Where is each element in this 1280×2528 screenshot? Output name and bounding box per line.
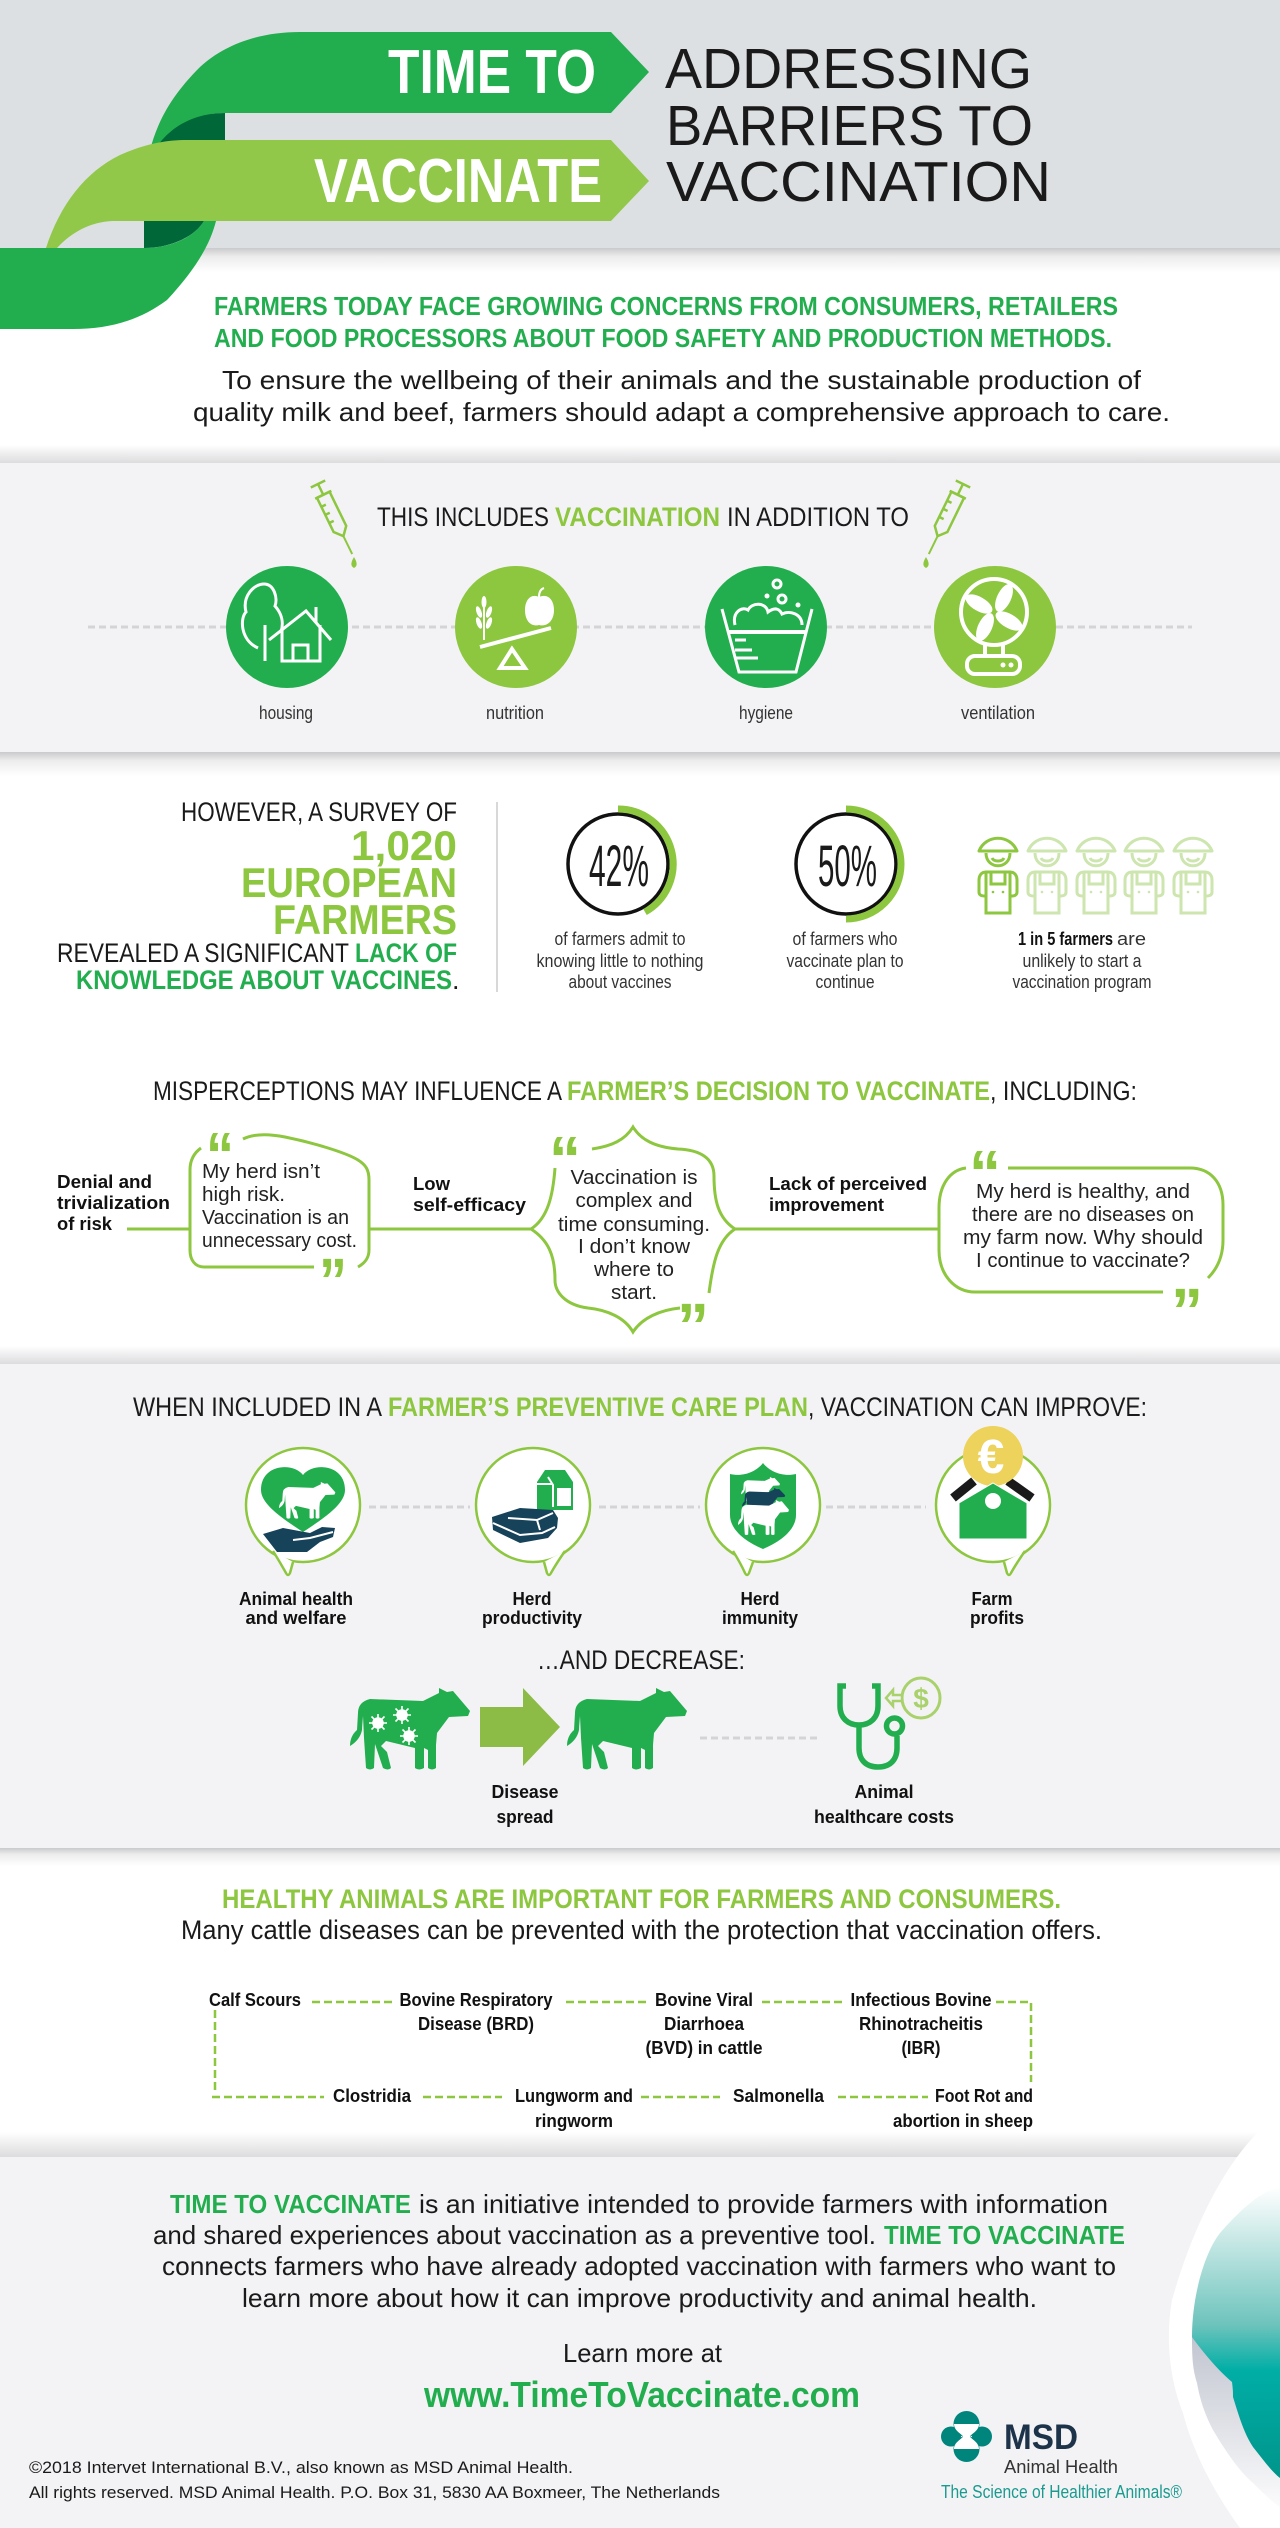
disease: salmonella: Salmonella bbox=[733, 2086, 825, 2106]
initiative text bbox=[153, 2189, 1125, 2313]
heading: includes vaccination: VACCINATION bbox=[555, 502, 720, 532]
copyright: All rights reserved. MSD Animal Health. P.O. Box 31, 5830 AA Boxmeer, The Netherlands bbox=[29, 2483, 720, 2502]
title bbox=[665, 37, 1051, 214]
ribbon label: TIME TO: TIME TO bbox=[388, 38, 596, 107]
disease: lungworm: ringworm bbox=[535, 2111, 613, 2131]
heading: includes vaccination: IN ADDITION TO bbox=[727, 502, 909, 532]
ribbon label: VACCINATE: VACCINATE bbox=[314, 147, 602, 216]
ribbon: dark green TIME TO bbox=[0, 32, 649, 329]
quote bubble: healthy herd: “ bbox=[969, 1137, 1001, 1209]
heading: and decrease: …AND DECREASE: bbox=[537, 1645, 745, 1675]
title: VACCINATION bbox=[666, 150, 1051, 214]
stat: 50 percent: 50% bbox=[818, 834, 877, 899]
icon: farm profits: € bbox=[978, 1431, 1004, 1484]
label: herd productivity bbox=[482, 1589, 582, 1628]
care labels bbox=[259, 703, 1035, 723]
misperception: lack of improvement: improvement bbox=[769, 1195, 884, 1215]
decorative swoosh bbox=[1169, 2130, 1280, 2528]
disease: IBR: Infectious Bovine bbox=[850, 1990, 992, 2010]
survey statement: HOWEVER, A SURVEY OF bbox=[181, 797, 457, 827]
disease loop bbox=[209, 1990, 1033, 2131]
initiative text: and shared experiences about vaccination as a preventive tool. bbox=[153, 2220, 876, 2250]
stat: 50 percent: continue bbox=[816, 972, 874, 992]
learn more: Learn more at bbox=[563, 2338, 723, 2368]
disease: IBR bbox=[850, 1990, 992, 2058]
heading: healthy animals: HEALTHY ANIMALS ARE IMPORTANT FOR FARMERS AND CONSUMERS. bbox=[222, 1884, 1061, 1914]
survey statement: KNOWLEDGE ABOUT VACCINES bbox=[76, 965, 452, 995]
ribbon: light green VACCINATE bbox=[46, 140, 649, 248]
label: healthcare costs: Animal bbox=[854, 1782, 914, 1802]
heading: improve bbox=[133, 1392, 1147, 1422]
disease: calf scours: Calf Scours bbox=[209, 1990, 301, 2010]
quote bubble: high risk bbox=[190, 1119, 369, 1317]
icon: housing bbox=[226, 566, 348, 688]
website: www.TimeToVaccinate.com bbox=[423, 2374, 860, 2415]
disease: BVD: (BVD) in cattle bbox=[646, 2038, 762, 2058]
misperception: low self-efficacy bbox=[413, 1174, 526, 1215]
disease: BVD: Bovine Viral bbox=[655, 1990, 753, 2010]
disease: foot rot bbox=[893, 2086, 1033, 2131]
stat: 1 in 5 farmers: vaccination program bbox=[1012, 972, 1152, 992]
label: herd immunity: immunity bbox=[722, 1608, 798, 1628]
survey statement: . bbox=[452, 965, 460, 995]
quote bubble: complex bbox=[531, 1123, 735, 1362]
quote bubble: healthy herd: I continue to vaccinate? bbox=[976, 1250, 1190, 1272]
quote bubble: healthy herd: My herd is healthy, and bbox=[976, 1181, 1190, 1203]
misperception: lack of improvement bbox=[769, 1174, 927, 1215]
label: herd productivity: Herd bbox=[512, 1589, 552, 1609]
care labels: ventilation bbox=[961, 703, 1035, 723]
initiative text: TIME TO VACCINATE bbox=[884, 2220, 1125, 2250]
disease: BRD bbox=[400, 1990, 552, 2034]
icon: nutrition bbox=[455, 566, 577, 688]
heading: misperceptions bbox=[153, 1076, 1137, 1106]
quote bubble: complex: Vaccination is bbox=[570, 1167, 698, 1189]
label: animal health: Animal health bbox=[239, 1589, 353, 1609]
stat: 42 percent: 42% bbox=[589, 834, 649, 899]
quote bubble: complex: ” bbox=[677, 1290, 709, 1362]
disease: BVD bbox=[646, 1990, 762, 2058]
label: animal health: and welfare bbox=[246, 1608, 346, 1628]
quote bubble: complex: start. bbox=[611, 1282, 657, 1304]
care labels: nutrition bbox=[486, 703, 544, 723]
initiative text: learn more about how it can improve productivity and animal health. bbox=[242, 2283, 1037, 2313]
icon: MSD hourglass bbox=[941, 2411, 992, 2462]
panel: benefits bbox=[0, 1346, 1280, 1866]
icon: stethoscope bbox=[840, 1678, 940, 1767]
logo: MSD Animal Health: The Science of Healthier Animals® bbox=[941, 2482, 1182, 2502]
icon: hygiene bbox=[705, 566, 827, 688]
icon: infected cow bbox=[350, 1688, 470, 1770]
quote bubble: healthy herd: there are no diseases on bbox=[972, 1204, 1194, 1226]
survey statement: EUROPEAN bbox=[241, 859, 457, 906]
panel: comprehensive care bbox=[0, 445, 1280, 776]
intro text: quality milk and beef, farmers should adapt a comprehensive approach to care. bbox=[193, 397, 1170, 427]
disease: BRD: Bovine Respiratory bbox=[400, 1990, 552, 2010]
label: farm profits: profits bbox=[970, 1608, 1024, 1628]
copyright bbox=[29, 2458, 720, 2502]
icon: syringe left bbox=[310, 480, 360, 568]
copyright: ©2018 Intervet International B.V., also known as MSD Animal Health. bbox=[29, 2458, 573, 2477]
icon: syringe right bbox=[921, 480, 971, 568]
stat: 42 percent: knowing little to nothing bbox=[536, 951, 704, 971]
quote bubble: complex: “ bbox=[549, 1123, 581, 1195]
label: herd immunity bbox=[722, 1589, 798, 1628]
icon: herd immunity bbox=[706, 1448, 820, 1575]
icon: ventilation bbox=[934, 566, 1056, 688]
intro text: To ensure the wellbeing of their animals and the sustainable production of bbox=[222, 365, 1142, 395]
quote bubble: healthy herd: ” bbox=[1171, 1275, 1203, 1347]
logo: MSD Animal Health bbox=[941, 2411, 1182, 2502]
initiative text: connects farmers who have already adopted vaccination with farmers who want to bbox=[162, 2251, 1116, 2281]
quote bubble: complex: where to bbox=[593, 1259, 674, 1281]
disease: IBR: Rhinotracheitis bbox=[859, 2014, 983, 2034]
stat: 1 in 5 farmers: 1 in 5 farmers bbox=[1018, 929, 1113, 949]
stat: 42 percent: about vaccines bbox=[568, 972, 672, 992]
panel: footer bbox=[0, 2130, 1280, 2528]
survey statement: FARMERS bbox=[273, 896, 457, 943]
survey statement: 1,020 bbox=[351, 822, 457, 869]
logo: MSD Animal Health: Animal Health bbox=[1004, 2457, 1118, 2477]
stat: 50 percent bbox=[786, 809, 904, 992]
quote bubble: high risk: high risk. bbox=[202, 1184, 285, 1206]
stat: 1 in 5 farmers: are bbox=[1117, 929, 1146, 949]
quote bubble: high risk: unnecessary cost. bbox=[202, 1230, 357, 1252]
icon: five farmers bbox=[979, 838, 1212, 913]
care labels: hygiene bbox=[739, 703, 793, 723]
stat: 42 percent: of farmers admit to bbox=[554, 929, 686, 949]
icon: herd productivity bbox=[476, 1448, 590, 1575]
initiative text: is an initiative intended to provide farmers with information bbox=[419, 2189, 1108, 2219]
survey statement: LACK OF bbox=[355, 938, 457, 968]
heading: misperceptions: FARMER’S DECISION TO VACCINATE bbox=[567, 1076, 990, 1106]
label: herd immunity: Herd bbox=[740, 1589, 780, 1609]
initiative text: TIME TO VACCINATE bbox=[170, 2189, 411, 2219]
header banner bbox=[0, 0, 1280, 329]
quote bubble: high risk: Vaccination is an bbox=[202, 1207, 349, 1229]
logo: MSD Animal Health: MSD bbox=[1004, 2418, 1078, 2457]
disease: BRD: Disease (BRD) bbox=[418, 2014, 534, 2034]
misperception: denial: Denial and bbox=[57, 1172, 152, 1192]
label: farm profits: Farm bbox=[972, 1589, 1012, 1609]
label: animal health bbox=[239, 1589, 353, 1628]
disease: lungworm: Lungworm and bbox=[515, 2086, 633, 2106]
icon: stethoscope: $ bbox=[913, 1683, 929, 1714]
quote bubble: high risk: My herd isn’t bbox=[202, 1161, 320, 1183]
care labels: housing bbox=[259, 703, 313, 723]
stat: 50 percent: of farmers who bbox=[792, 929, 898, 949]
stat: 50 percent: vaccinate plan to bbox=[786, 951, 904, 971]
label: herd productivity: productivity bbox=[482, 1608, 582, 1628]
label: healthcare costs: healthcare costs bbox=[814, 1807, 954, 1827]
misperception: lack of improvement: Lack of perceived bbox=[769, 1174, 927, 1194]
quote bubble: high risk: ” bbox=[319, 1245, 347, 1317]
survey statement bbox=[57, 797, 460, 995]
stat: 1 in 5 farmers: unlikely to start a bbox=[1022, 951, 1142, 971]
misperception: low self-efficacy: self-efficacy bbox=[413, 1195, 526, 1215]
heading: misperceptions: , INCLUDING: bbox=[990, 1076, 1137, 1106]
quote bubble: healthy herd bbox=[939, 1137, 1223, 1347]
quote bubble: high risk: “ bbox=[206, 1119, 234, 1191]
heading: improve: WHEN INCLUDED IN A bbox=[133, 1392, 382, 1422]
label: disease spread bbox=[492, 1782, 558, 1827]
misperception: denial bbox=[57, 1172, 170, 1234]
intro text bbox=[193, 365, 1170, 427]
label: farm profits bbox=[970, 1589, 1024, 1628]
intro heading: FARMERS TODAY FACE GROWING CONCERNS FROM CONSUMERS, RETAILERS bbox=[214, 291, 1118, 321]
intro heading: AND FOOD PROCESSORS ABOUT FOOD SAFETY AND PRODUCTION METHODS. bbox=[214, 323, 1112, 353]
icon: animal health bbox=[246, 1448, 360, 1575]
icon: healthy cow bbox=[567, 1688, 687, 1770]
title: ADDRESSING bbox=[665, 37, 1032, 101]
intro heading bbox=[214, 291, 1118, 353]
icon: farm profits bbox=[936, 1426, 1050, 1575]
disease: clostridia: Clostridia bbox=[333, 2086, 412, 2106]
disease: BVD: Diarrhoea bbox=[664, 2014, 745, 2034]
quote bubble: healthy herd: my farm now. Why should bbox=[963, 1227, 1203, 1249]
misperception: denial: trivialization bbox=[57, 1193, 170, 1213]
misperception: low self-efficacy: Low bbox=[413, 1174, 451, 1194]
heading: improve: FARMER’S PREVENTIVE CARE PLAN bbox=[388, 1392, 808, 1422]
heading: improve: , VACCINATION CAN IMPROVE: bbox=[808, 1392, 1147, 1422]
quote bubble: complex: complex and bbox=[576, 1190, 692, 1212]
arrow: disease reduced bbox=[480, 1688, 560, 1766]
label: disease spread: spread bbox=[496, 1807, 554, 1827]
quote bubble: complex: time consuming. bbox=[558, 1214, 710, 1236]
disease: IBR: (IBR) bbox=[902, 2038, 940, 2058]
label: healthcare costs bbox=[814, 1782, 954, 1827]
text: cattle diseases: Many cattle diseases can be prevented with the protection that vaccination offers. bbox=[181, 1915, 1102, 1945]
disease: lungworm bbox=[515, 2086, 633, 2131]
heading: misperceptions: MISPERCEPTIONS MAY INFLUENCE A bbox=[153, 1076, 562, 1106]
label: disease spread: Disease bbox=[492, 1782, 558, 1802]
connector lines bbox=[127, 1228, 939, 1230]
stat: 42 percent bbox=[536, 809, 704, 992]
heading: includes vaccination: THIS INCLUDES bbox=[377, 502, 549, 532]
stat: 1 in 5 farmers bbox=[979, 838, 1212, 992]
quote bubble: complex: I don’t know bbox=[578, 1236, 691, 1258]
disease: foot rot: Foot Rot and bbox=[935, 2086, 1033, 2106]
survey statement: REVEALED A SIGNIFICANT bbox=[57, 938, 349, 968]
title: BARRIERS TO bbox=[666, 94, 1033, 158]
heading: includes vaccination bbox=[377, 502, 909, 532]
disease: foot rot: abortion in sheep bbox=[893, 2111, 1033, 2131]
misperception: denial: of risk bbox=[57, 1214, 113, 1234]
